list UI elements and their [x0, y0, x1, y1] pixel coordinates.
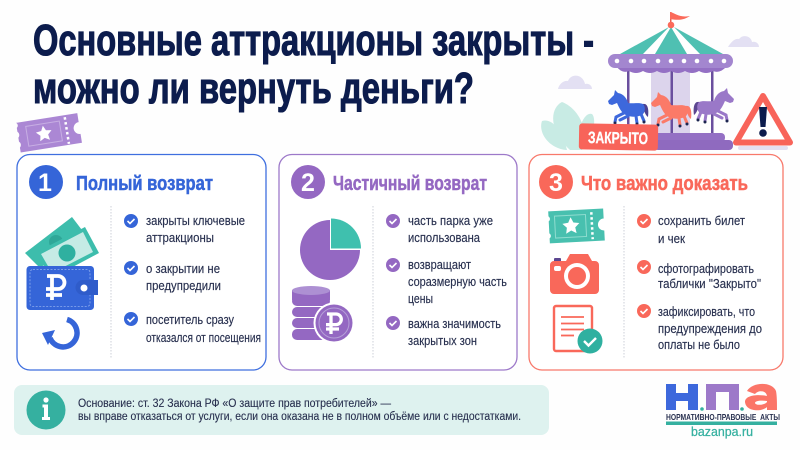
panel: partial refund	[279, 154, 517, 370]
item 1: использована	[408, 231, 480, 245]
item 3: посетитель сразу	[146, 313, 235, 327]
horse: coral	[651, 92, 691, 128]
item 3: оплаты не было	[658, 338, 740, 352]
item 3: закрытых зон	[408, 334, 477, 348]
item 2: возвращают	[408, 258, 471, 272]
item 2	[637, 260, 761, 291]
item 1	[637, 214, 745, 246]
panel: legal basis callout	[14, 385, 549, 435]
badge 2	[291, 165, 325, 199]
item 2: о закрытии не	[146, 262, 220, 276]
item 1: и чек	[658, 232, 685, 246]
closed sign: ЗАКРЫТО	[588, 129, 648, 148]
icon: coins with ruble	[292, 286, 354, 344]
callout text	[78, 398, 521, 423]
item 1	[386, 214, 493, 245]
item 3	[386, 316, 501, 348]
badge 1: 1	[38, 169, 52, 197]
carousel back panel	[651, 70, 690, 134]
panel: what to prove	[529, 154, 783, 370]
item 1: сохранить билет	[658, 214, 745, 228]
icon: teal ticket	[548, 209, 605, 243]
icon: warning triangle	[736, 96, 790, 150]
item 2: предупредили	[146, 279, 221, 293]
icon: cloud left	[558, 76, 592, 89]
closed sign	[579, 123, 658, 151]
badge 3	[539, 165, 573, 199]
item 2	[124, 261, 221, 293]
horse: blue	[608, 90, 648, 126]
carousel band with lights	[608, 54, 733, 73]
illustration: carousel	[541, 12, 790, 151]
icon: return arrow	[42, 320, 77, 347]
icon: document with check	[554, 306, 602, 354]
icon: purple ticket	[16, 113, 82, 153]
heading: Частичный возврат	[333, 173, 487, 195]
logo	[666, 384, 780, 439]
item 3	[637, 304, 762, 352]
logo: bazanpa.ru	[691, 424, 753, 439]
title	[33, 16, 594, 113]
item 3	[124, 312, 261, 345]
item 2: соразмерную часть	[408, 275, 507, 289]
item 2: цены	[408, 292, 433, 306]
heading: Что важно доказать	[581, 173, 748, 195]
icon: banknotes	[25, 217, 99, 278]
item 1: закрыты ключевые	[146, 214, 245, 228]
icon: camera	[550, 254, 599, 294]
icon: cloud right	[728, 36, 759, 47]
icon: flag	[668, 12, 690, 28]
item 2: сфотографировать	[658, 262, 754, 276]
carousel roof	[620, 27, 723, 55]
item 3: зафиксировать, что	[658, 305, 755, 319]
badge 2: 2	[301, 169, 315, 197]
item 3: важна значимость	[408, 317, 501, 331]
item 2: таблички "Закрыто"	[658, 277, 761, 291]
horse: purple	[694, 88, 734, 124]
item 1: аттракционы	[146, 231, 214, 245]
heading: Полный возврат	[76, 173, 213, 195]
item 2	[386, 258, 507, 306]
callout text: Основание: ст. 32 Закона РФ «О защите прав потребителей» —	[78, 398, 391, 410]
icon: wallet	[26, 266, 98, 310]
icon: pie chart	[300, 218, 361, 280]
title: Основные аттракционы закрыты -	[33, 16, 594, 65]
item 1	[124, 214, 245, 245]
icon: info	[26, 390, 66, 430]
title: можно ли вернуть деньги?	[33, 64, 474, 113]
badge 1	[29, 165, 63, 199]
carousel base	[654, 133, 733, 150]
item 3: предупреждения до	[658, 322, 762, 336]
callout text: вы вправе отказаться от услуги, если она оказана не в полном объёме или с недостатками.	[78, 411, 521, 423]
panel: full refund	[17, 154, 266, 370]
item 1: часть парка уже	[408, 214, 493, 228]
icon: plant	[541, 102, 594, 150]
item 3: отказался от посещения	[146, 331, 261, 345]
carousel poles	[627, 70, 714, 136]
badge 3: 3	[549, 169, 563, 197]
